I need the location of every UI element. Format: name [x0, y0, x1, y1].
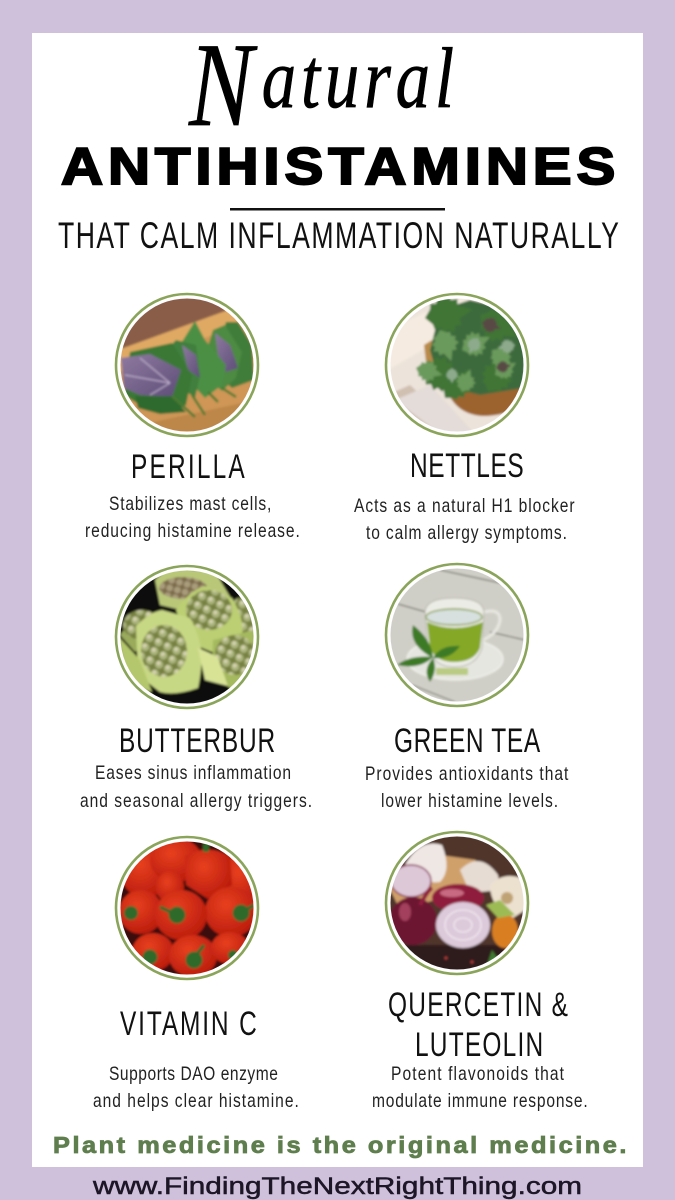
description: butterbur: [80, 762, 312, 811]
heading: perilla: PERILLA: [131, 448, 245, 486]
icon: red onions and garlic: [386, 832, 528, 975]
subtitle: THAT CALM INFLAMMATION NATURALLY: [58, 215, 619, 256]
icon: red bell peppers: [116, 837, 262, 979]
heading: green tea: GREEN TEA: [394, 722, 540, 760]
website url: www.FindingTheNextRightThing.com: [92, 1173, 582, 1200]
description: vitamin C: Supports DAO enzyme: [109, 1063, 278, 1084]
description: green tea: Provides antioxidants that: [365, 763, 569, 784]
description: nettles: [354, 495, 575, 543]
icon: cup of green tea: [386, 564, 528, 706]
description: green tea: [365, 763, 569, 811]
icon: butterbur buds: [116, 566, 258, 708]
heading: vitamin C: VITAMIN C: [120, 1005, 257, 1043]
description: perilla: Stabilizes mast cells,: [109, 493, 271, 514]
panel: green tea: [365, 564, 569, 811]
description: perilla: reducing histamine release.: [85, 520, 300, 541]
description: butterbur: Eases sinus inflammation: [95, 762, 291, 783]
heading: butterbur: BUTTERBUR: [119, 722, 275, 760]
panel: quercetin and luteolin: [372, 832, 588, 1111]
heading: quercetin and luteolin: [388, 986, 568, 1064]
tagline: Plant medicine is the original medicine.: [53, 1133, 626, 1159]
description: perilla: [85, 493, 300, 541]
icon: nettles in bowl: [386, 290, 528, 436]
icon: perilla leaves: [116, 294, 258, 436]
description: nettles: to calm allergy symptoms.: [366, 522, 567, 543]
description: vitamin C: and helps clear histamine.: [93, 1090, 299, 1111]
panel: vitamin C: [93, 837, 299, 1111]
panel: butterbur: [80, 566, 312, 811]
description: green tea: lower histamine levels.: [381, 790, 558, 811]
description: butterbur: and seasonal allergy triggers.: [80, 790, 312, 811]
panel: nettles: [354, 290, 575, 543]
title: Antihistamines: ANTIHISTAMINES: [61, 137, 615, 195]
heading: nettles: NETTLES: [410, 447, 524, 485]
description: quercetin and luteolin: Potent flavonoids that: [391, 1063, 564, 1084]
description: nettles: Acts as a natural H1 blocker: [354, 495, 575, 516]
description: quercetin and luteolin: modulate immune response.: [372, 1090, 588, 1111]
description: quercetin and luteolin: [372, 1063, 588, 1111]
title: Natural: N: [188, 18, 258, 152]
heading: quercetin and luteolin: LUTEOLIN: [415, 1026, 543, 1064]
heading: quercetin and luteolin: QUERCETIN &: [388, 986, 568, 1024]
title: Natural: atural: [262, 31, 459, 126]
divider rule: [230, 208, 445, 210]
panel: perilla: [85, 294, 300, 541]
description: vitamin C: [93, 1063, 299, 1111]
